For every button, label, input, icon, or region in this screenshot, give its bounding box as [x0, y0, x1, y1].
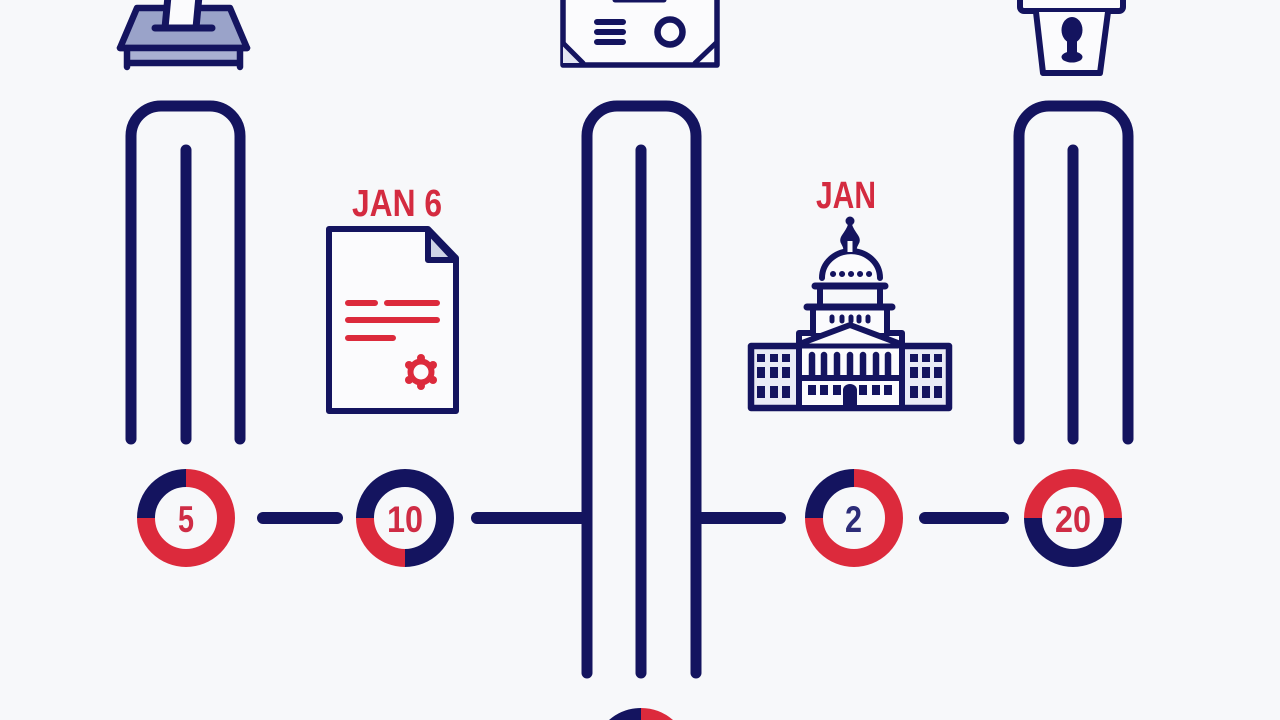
ring: date 5: 5 — [178, 499, 194, 540]
ring: date 20: 20 — [1055, 499, 1091, 540]
date label: JAN 6: JAN 6 — [352, 183, 442, 225]
connector: 2 to 20 — [925, 512, 1003, 524]
icon: podium with microphone — [1020, 0, 1123, 73]
date label: JAN: JAN — [816, 175, 876, 217]
centre tube column — [587, 106, 696, 673]
ring: date 10 — [365, 478, 445, 558]
ring: date 5 — [146, 478, 226, 558]
ring: bottom partial — [609, 708, 673, 720]
connector: 5 to 10 — [263, 512, 337, 524]
ring: date 2: 2 — [845, 499, 862, 540]
connector: 10 to centre column — [477, 512, 582, 524]
icon: document with seal — [329, 229, 456, 411]
ring: date 2 — [814, 478, 894, 558]
icon: capitol building — [751, 216, 949, 408]
right tube column — [1019, 106, 1128, 439]
icon: certificate — [563, 0, 717, 65]
icon: ballot box — [120, 0, 247, 67]
connector: centre column to 2 — [702, 512, 780, 524]
ring: date 10: 10 — [387, 499, 423, 540]
ring: date 20 — [1033, 478, 1113, 558]
left tube column — [131, 106, 240, 439]
